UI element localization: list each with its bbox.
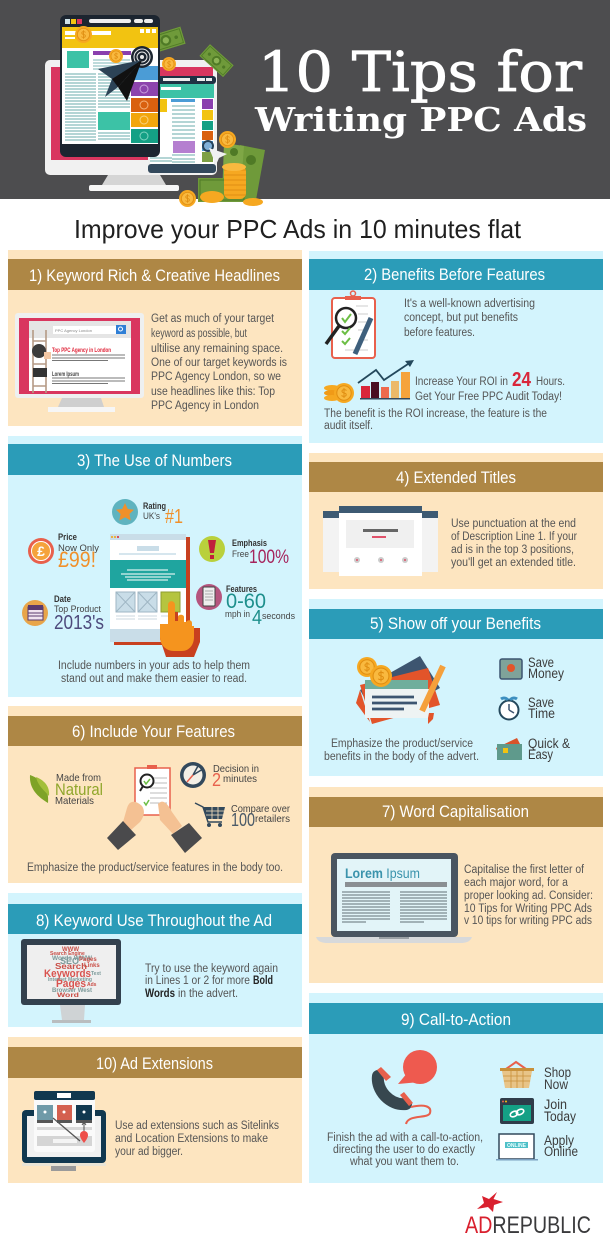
text block: benefits in the body of the advert. [324, 751, 479, 763]
text block: Finish the ad with a call-to-action, [327, 1132, 483, 1144]
logo: Ad Republic: ADREPUBLIC [465, 1212, 591, 1239]
text block: Include numbers in your ads to help them [58, 660, 250, 672]
panel: 6 include your features [8, 706, 302, 883]
text block: and Location Extensions to make [115, 1133, 268, 1145]
text block [464, 864, 593, 927]
text block [404, 298, 535, 339]
action: join today [500, 1097, 576, 1124]
callout: example ad: 24 [512, 369, 532, 391]
word cloud: SEO [60, 956, 79, 966]
action: apply online [496, 1133, 578, 1160]
subtitle: Improve your PPC Ads in 10 minutes flat [74, 214, 522, 244]
label: decision [212, 763, 259, 790]
stat: rating [112, 499, 183, 528]
action: apply online: Apply [544, 1133, 574, 1148]
text block [327, 1132, 483, 1168]
label: decision: minutes [223, 773, 257, 785]
callout: example ad [415, 369, 565, 403]
icon: leaf [30, 775, 49, 803]
benefit: quick and easy [496, 736, 570, 762]
heading: tip 5: 5) Show off your Benefits [370, 615, 541, 633]
panel: 9 call-to-action [309, 993, 603, 1183]
action: join today: Join [544, 1097, 567, 1112]
label: decision: Decision in [213, 763, 259, 775]
text block: The benefit is the ROI increase, the feature is the [324, 408, 547, 420]
stat: features: Features [226, 584, 257, 594]
stat: features: 4 [252, 607, 262, 629]
benefit: quick and easy: Easy [528, 747, 553, 762]
label: compare retailers: 100 [231, 810, 255, 830]
stat: rating: Rating [143, 501, 166, 511]
word cloud: Word [57, 993, 79, 999]
heading: tip 9: 9) Call-to-Action [401, 1011, 511, 1029]
illustration: laptop: Lorem Ipsum [345, 865, 420, 881]
icon: clipboard with magnifier and pen [326, 291, 375, 358]
logo: Ad Republic [465, 1192, 591, 1239]
label: natural materials: Materials [55, 795, 94, 807]
icon: clock [180, 762, 206, 788]
benefit: save time: Time [528, 706, 555, 721]
illustration: monitor with word cloud [21, 939, 121, 1023]
illustration: monitor with ad: Lorem Ipsum [52, 372, 79, 378]
panel: 5 show off your benefits [309, 599, 603, 776]
word cloud: Ads [87, 982, 97, 988]
stat: price [28, 532, 99, 572]
stat: features: mph in [225, 609, 250, 620]
text block: One of our target keywords is [151, 357, 287, 369]
heading: tip 7: 7) Word Capitalisation [382, 803, 529, 821]
illustration: web pages [323, 506, 438, 576]
stat: date: Top Product [54, 604, 101, 615]
text block: Get as much of your target [151, 313, 275, 325]
panel: 7 word capitalisation [309, 787, 603, 983]
illustration: laptop [316, 853, 472, 943]
word cloud: Search [55, 962, 87, 971]
title: 10 Tips for [258, 40, 583, 104]
stat: date [22, 594, 104, 634]
panel: 8 keyword use [8, 893, 302, 1027]
text block: Words [145, 988, 175, 1000]
text block [145, 963, 278, 1000]
text block [324, 738, 479, 763]
icon: cart [195, 803, 225, 827]
stat: features: 0-60 [226, 590, 266, 613]
stat: price: £99! [58, 547, 96, 572]
stat: emphasis: 100% [249, 547, 289, 568]
callout: example ad: Get Your Free PPC Audit Today! [415, 391, 562, 403]
action: shop now: Now [544, 1077, 568, 1092]
text block: 10 Tips for Writing PPC Ads [464, 903, 592, 915]
stat: rating: UK's [143, 511, 160, 522]
text block: use headlines like this: Top [151, 386, 275, 398]
text block [115, 1120, 279, 1158]
illustration: cheques, coins and pencil [356, 656, 443, 724]
illustration: monitor with ad: Top PPC Agency in London [52, 348, 111, 354]
text block: you'll get an extended title. [451, 557, 576, 569]
heading: tip 10: 10) Ad Extensions [96, 1055, 213, 1073]
action: apply online: Online [544, 1144, 578, 1159]
text block: keyword as possible, but [151, 328, 248, 340]
label: compare retailers [231, 803, 290, 830]
action: apply online: ONLINE [507, 1143, 527, 1149]
illustration: monitor with ad: PPC Agency London [55, 328, 92, 333]
heading: tip 2: 2) Benefits Before Features [364, 266, 545, 284]
text block: Capitalise the first letter of [464, 864, 585, 876]
text block [58, 660, 250, 685]
stat: emphasis: Emphasis [232, 538, 267, 548]
stat: price: Now Only [58, 543, 99, 554]
text block: your ad bigger. [115, 1146, 183, 1158]
label: compare retailers: Compare over [231, 803, 290, 815]
action: join today: Today [544, 1109, 576, 1124]
text block: proper looking ad. Consider: [464, 890, 593, 902]
text block: ultilise any remaining space. [151, 343, 283, 355]
heading: tip 8: 8) Keyword Use Throughout the Ad [36, 912, 272, 930]
text block: PPC Agency in London [151, 400, 259, 412]
word cloud: Text [91, 971, 101, 977]
text block [151, 313, 287, 412]
text block: of Description Line 1. If your [451, 531, 577, 543]
label: decision: 2 [212, 770, 221, 790]
illustration: web page with hand [110, 534, 200, 657]
stat: date: 2013's [54, 612, 104, 634]
text block: directing the user to do exactly [333, 1144, 475, 1156]
illustration: hands holding clipboard [107, 765, 202, 853]
benefit: quick and easy: Quick & [528, 736, 570, 751]
heading: tip 3: 3) The Use of Numbers [77, 452, 232, 470]
text block [324, 408, 547, 432]
label: natural materials: Made from [56, 772, 101, 784]
icon: growth chart and coins [324, 360, 414, 403]
illustration: monitor with extensions [22, 1091, 106, 1171]
illustration: monitor with ad [15, 313, 144, 412]
text block: It's a well-known advertising [404, 298, 535, 310]
text block: Try to use the keyword again [145, 963, 278, 975]
text block: each major word, for a [464, 877, 569, 889]
text block [451, 518, 577, 569]
text block: v 10 tips for writing PPC ads [464, 915, 592, 927]
benefit: save time: Save [528, 695, 554, 710]
benefit: save time [500, 695, 555, 721]
text block: Emphasize the product/service [331, 738, 473, 750]
text block: in Lines 1 or 2 for more [145, 975, 250, 987]
panel: 2 benefits before features [309, 251, 603, 443]
action: shop now: Shop [544, 1065, 571, 1080]
stat: emphasis: Free [232, 549, 249, 560]
word cloud: Browser West [52, 988, 92, 994]
benefit: save money [500, 655, 564, 681]
text block: before features. [404, 327, 475, 339]
text block: Emphasize the product/service features in the body too. [27, 862, 283, 874]
callout: example ad: Increase Your ROI in [415, 376, 508, 388]
label: natural materials: Natural [55, 780, 103, 799]
word cloud: Internet Marketing [48, 977, 92, 983]
text block: Use ad extensions such as Sitelinks [115, 1120, 279, 1132]
text block: what you want them to. [349, 1156, 459, 1168]
word cloud: Pages [56, 978, 86, 990]
panel: 10 ad extensions [8, 1037, 302, 1183]
icon: phone and speech bubble [377, 1050, 437, 1124]
panel: 3 use of numbers [8, 436, 302, 697]
text block: stand out and make them easier to read. [61, 673, 247, 685]
word cloud: Keywords [44, 968, 91, 980]
stat: emphasis [199, 536, 289, 568]
header banner [0, 0, 610, 207]
stat: price: Price [58, 532, 77, 542]
callout: example ad: Hours. [536, 376, 565, 388]
label: compare retailers: retailers [255, 813, 290, 825]
title [254, 40, 587, 139]
word cloud: WWW [62, 947, 79, 953]
text block: concept, but put benefits [404, 312, 518, 324]
stat: price: £ [37, 543, 45, 559]
panel: 4 extended titles [309, 453, 603, 589]
word cloud: Search Engine [50, 951, 85, 957]
title: Writing PPC Ads [254, 100, 587, 139]
word cloud: Links [84, 963, 100, 969]
word cloud: Pages [79, 957, 97, 963]
text block: in the advert. [178, 988, 238, 1000]
action: shop now [500, 1062, 571, 1092]
heading: tip 4: 4) Extended Titles [396, 469, 516, 487]
word cloud [44, 947, 101, 999]
stat: rating: #1 [165, 506, 183, 528]
label: natural materials [55, 772, 103, 807]
word cloud: Words WWW [52, 956, 92, 962]
stat: features [196, 584, 295, 629]
text block: audit itself. [324, 420, 373, 432]
benefit: save money: Save [528, 655, 554, 670]
benefit: save money: Money [528, 666, 564, 681]
text block: Bold [253, 975, 273, 987]
illustration: monitors, cursor and money [45, 15, 265, 207]
stat: features: seconds [262, 611, 295, 622]
heading: tip 6: 6) Include Your Features [72, 723, 235, 741]
text block: ad is in the top 3 positions, [451, 544, 574, 556]
panel: 1 keyword rich headlines [8, 250, 302, 426]
heading: tip 1: 1) Keyword Rich & Creative Headlines [29, 267, 280, 285]
text block: Use punctuation at the end [451, 518, 576, 530]
text block: PPC Agency London, so we [151, 371, 281, 383]
stat: date: Date [54, 594, 71, 604]
